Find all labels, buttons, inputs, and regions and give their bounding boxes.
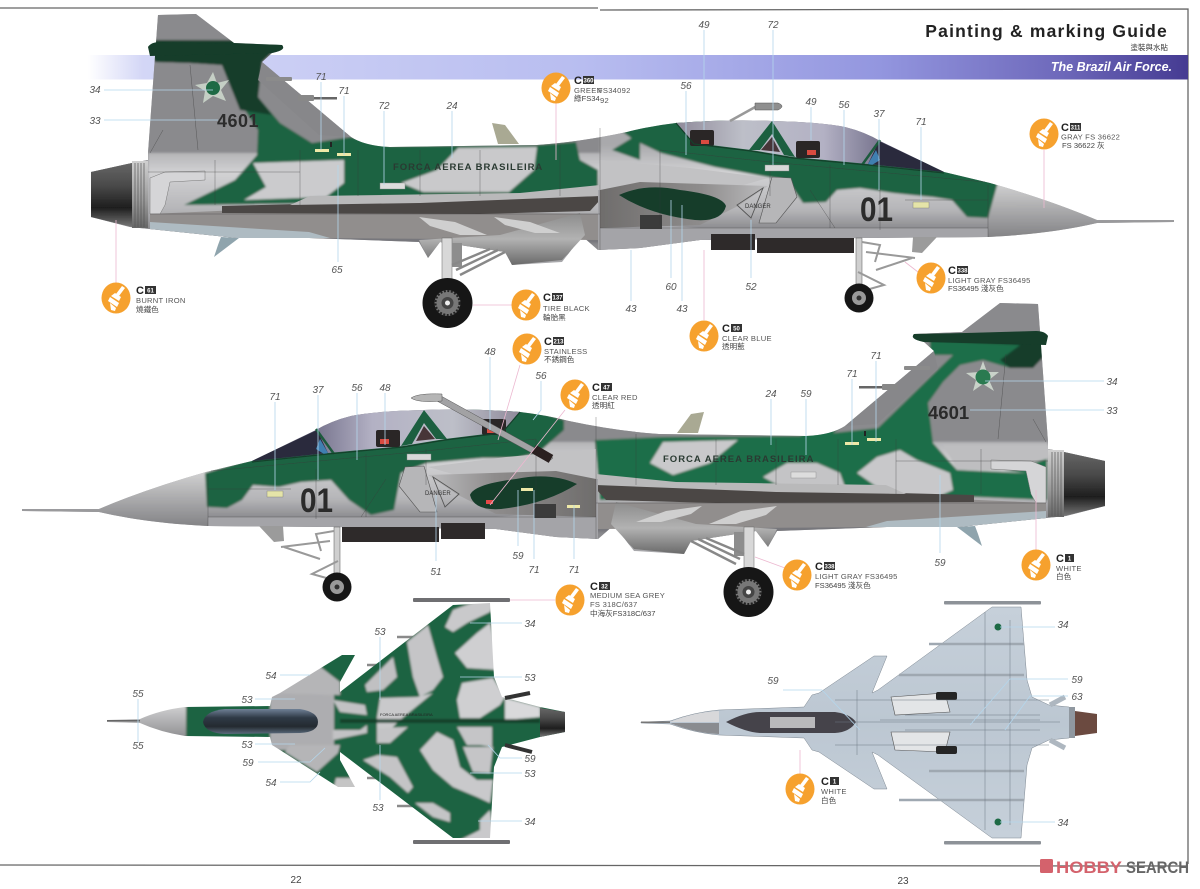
page number 23: 23: [897, 876, 909, 887]
callout: C360 green: 92: [600, 96, 609, 105]
callout: C32 medium sea grey: FS 318C/637: [590, 600, 638, 609]
labels and leader lines: upper side view: 71: [915, 117, 927, 128]
callout: C47 clear red: [560, 380, 638, 410]
labels and leader lines: lower side view: 24: [764, 389, 777, 400]
labels and leader lines: lower side view: 56: [535, 371, 547, 382]
nozzle: [540, 708, 565, 737]
labels and leader lines: lower side view: 71: [269, 392, 281, 403]
callout: C1 white: 白色: [1056, 571, 1072, 581]
callout: C311 gray: [1030, 118, 1120, 150]
labels and leader lines: top view: 53: [241, 695, 253, 706]
labels and leader lines: lower side view: [269, 347, 1118, 600]
labels and leader lines: top view: 59: [524, 754, 536, 765]
labels and leader lines: upper side view: 43: [676, 304, 688, 315]
labels and leader lines: top view: 34: [524, 817, 536, 828]
labels and leader lines: upper side view: 33: [89, 116, 101, 127]
callout: C61 burnt iron: [102, 282, 186, 314]
panel lines: [835, 612, 1060, 830]
labels and leader lines: top view: 53: [372, 803, 384, 814]
labels and leader lines: upper side view: 72: [767, 20, 779, 31]
callout: C338 light gray upper: 338: [957, 268, 968, 274]
callout: C360 green: 360: [583, 78, 594, 84]
probe: [107, 720, 140, 722]
labels and leader lines: upper side view: 72: [378, 101, 390, 112]
callout: C137 tire black: TIRE BLACK: [543, 304, 590, 313]
labels and leader lines: lower side view: 33: [1106, 406, 1118, 417]
callout: C50 clear blue: 透明藍: [722, 341, 745, 351]
callout: C338 light gray upper: C: [948, 265, 956, 277]
callout: C1 white underside: [786, 774, 847, 805]
callout: C360 green: GREEN: [574, 86, 602, 95]
subtitle chinese: 塗裝與水貼: [1130, 42, 1168, 52]
nose number: 01: [300, 482, 333, 520]
callout: C61 burnt iron: 燒鐵色: [136, 304, 159, 314]
top aircraft camouflage: [80, 5, 1190, 255]
callout: C338 light gray upper: FS36495 淺灰色: [948, 283, 1004, 293]
labels and leader lines: lower side view: 59: [512, 551, 524, 562]
labels and leader lines: upper side view: 49: [698, 20, 710, 31]
airbrake arms: [505, 693, 532, 752]
callout: C61 burnt iron: BURNT IRON: [136, 296, 186, 305]
title: Painting & marking Guide: [925, 21, 1168, 41]
labels and leader lines: top view: 54: [265, 778, 277, 789]
callout: C338 light gray lower: FS36495 淺灰色: [815, 580, 871, 590]
labels and leader lines: underside view: 59: [767, 676, 779, 687]
mast: [730, 103, 782, 121]
labels and leader lines: lower side view: 56: [351, 383, 363, 394]
aircraft: upper side view, facing right: [80, 5, 1190, 328]
fin roundel: [195, 72, 229, 103]
labels and leader lines: upper side view: 71: [315, 72, 327, 83]
callout: C311 gray: GRAY FS 36622: [1061, 132, 1120, 142]
purple title band: [88, 55, 1188, 80]
callout: C50 clear blue: [690, 320, 772, 352]
labels and leader lines: upper side view: 56: [680, 81, 692, 92]
labels and leader lines: upper side view: 60: [665, 282, 677, 293]
callout: C213 stainless: 213: [553, 340, 564, 346]
labels and leader lines: upper side view: 71: [338, 86, 350, 97]
labels and leader lines: upper side view: 24: [445, 101, 458, 112]
callout: C32 medium sea grey: MEDIUM SEA GREY: [590, 591, 665, 600]
fin roundel: [966, 361, 999, 391]
callout: C213 stainless: 不銹鋼色: [544, 354, 575, 364]
danger text: DANGER: [425, 491, 451, 497]
labels and leader lines: top view: 59: [242, 758, 254, 769]
callout: C47 clear red: CLEAR RED: [592, 393, 638, 402]
callout: C1 white underside: 白色: [821, 795, 837, 805]
red light: [486, 500, 493, 504]
aircraft: underside view, light grey: [641, 601, 1097, 844]
labels and leader lines: lower side view: 71: [528, 565, 540, 576]
callout: C32 medium sea grey: 32: [601, 584, 608, 590]
labels and leader lines: upper side view: 43: [625, 304, 637, 315]
callout: C1 white: WHITE: [1056, 564, 1082, 573]
labels and leader lines: upper side view: 34: [89, 85, 101, 96]
callout: C50 clear blue: CLEAR BLUE: [722, 334, 772, 343]
callout: C360 green: 綠FS34: [574, 93, 600, 103]
labels and leader lines: lower side view: 37: [312, 385, 324, 396]
callout: C1 white: C: [1056, 553, 1064, 565]
labels and leader lines: lower side view: 59: [934, 558, 946, 569]
roundels: [994, 624, 1002, 826]
callout: C1 white underside: WHITE: [821, 787, 847, 796]
callout: C47 clear red: C: [592, 382, 600, 394]
callout: C213 stainless: [512, 334, 587, 364]
labels and leader lines: underside view: 59: [1071, 675, 1083, 686]
labels and leader lines: top view: [132, 619, 536, 828]
nose shade: [670, 711, 719, 722]
labels and leader lines: top view: 53: [524, 673, 536, 684]
nose number: 01: [860, 191, 893, 229]
callout: C311 gray: FS 36622 灰: [1062, 140, 1105, 150]
ventral fins: [1050, 697, 1065, 748]
missiles under wings: [899, 644, 1024, 800]
callout: C61 burnt iron: C: [136, 285, 144, 297]
callout: C213 stainless: C: [544, 336, 552, 348]
callout: C338 light gray upper: [916, 262, 1031, 294]
aircraft: lower side view, facing left: [10, 295, 1120, 617]
nozzle: [1069, 707, 1075, 738]
labels and leader lines: top view: 34: [524, 619, 536, 630]
labels and leader lines: top view: 53: [374, 627, 386, 638]
labels and leader lines: lower side view: 34: [1106, 377, 1118, 388]
watermark: [1040, 859, 1189, 877]
labels and leader lines: underside view: [767, 620, 1083, 829]
callout: C61 burnt iron: 61: [147, 288, 154, 294]
labels and leader lines: lower side view: 51: [430, 567, 442, 578]
callout: C338 light gray lower: [782, 560, 898, 590]
tail number: 4601: [217, 111, 259, 131]
callout: C213 stainless: STAINLESS: [544, 347, 587, 356]
callout: C338 light gray lower: LIGHT GRAY FS36495: [815, 572, 898, 581]
lettering: FORCA AEREA BRASILEIRA: [380, 712, 433, 717]
callout: C50 clear blue: 50: [733, 326, 740, 332]
callout: C1 white: [1022, 550, 1082, 581]
callout: C1 white: 1: [1068, 556, 1072, 562]
callout: C137 tire black: [512, 290, 590, 322]
labels and leader lines: upper side view: 56: [838, 100, 850, 111]
callout: C1 white underside: 1: [833, 780, 837, 786]
cockpit floor: [726, 712, 856, 733]
callout: C360 green: FS34092: [598, 86, 631, 95]
band label: The Brazil Air Force.: [1051, 60, 1172, 74]
labels and leader lines: upper side view: 37: [873, 109, 885, 120]
probe: [641, 722, 670, 723]
stainless boarding tube: [411, 394, 553, 463]
labels and leader lines: underside view: 34: [1057, 818, 1069, 829]
labels and leader lines: top view: 53: [241, 740, 253, 751]
labels and leader lines: underside view: 63: [1071, 692, 1083, 703]
callout: C32 medium sea grey: C: [590, 581, 598, 593]
watermark: HOBBY: [1056, 859, 1122, 877]
labels and leader lines: upper side view: [89, 20, 1044, 320]
aircraft: top view camouflage scheme: [95, 595, 575, 850]
callout: C338 light gray upper: LIGHT GRAY FS36495: [948, 276, 1031, 285]
wheel wells: [891, 692, 957, 754]
callout: C32 medium sea grey: 中海灰FS318C/637: [590, 608, 655, 618]
labels and leader lines: lower side view: 48: [379, 383, 391, 394]
fuselage lettering: FORCA AEREA BRASILEIRA: [393, 162, 543, 173]
callout: C360 green: [542, 72, 631, 105]
labels and leader lines: lower side view: 71: [870, 351, 882, 362]
labels and leader lines: lower side view: 59: [800, 389, 812, 400]
labels and leader lines: upper side view: 49: [805, 97, 817, 108]
callout: C360 green: C: [574, 75, 582, 87]
labels and leader lines: upper side view: 52: [745, 282, 757, 293]
labels and leader lines: top view: 54: [265, 671, 277, 682]
danger text: DANGER: [745, 204, 771, 210]
labels and leader lines: top view: 53: [524, 769, 536, 780]
labels and leader lines: underside view: 34: [1057, 620, 1069, 631]
tail number: 4601: [928, 402, 969, 423]
callout: C1 white underside: C: [821, 776, 829, 788]
callout: C32 medium sea grey: [556, 581, 665, 618]
labels and leader lines: lower side view: 71: [568, 565, 580, 576]
labels and leader lines: lower side view: 71: [846, 369, 858, 380]
callout: C47 clear red: 透明紅: [592, 400, 615, 410]
callout: C137 tire black: 137: [552, 296, 563, 302]
labels and leader lines: upper side view: 65: [331, 265, 343, 276]
callout: C137 tire black: 輪胎黑: [543, 312, 566, 322]
labels and leader lines: lower side view: 48: [484, 347, 496, 358]
callout: C311 gray: 311: [1071, 126, 1081, 132]
fuselage lettering: FORCA AEREA BRASILEIRA: [663, 454, 814, 465]
lower aircraft camouflage: [10, 295, 1120, 545]
labels and leader lines: top view: 55: [132, 741, 144, 752]
canopy: [203, 709, 318, 734]
callout: C311 gray: C: [1061, 122, 1069, 134]
labels and leader lines: top view: 55: [132, 689, 144, 700]
watermark: SEARCH: [1126, 859, 1189, 877]
callout: C338 light gray lower: 338: [824, 564, 835, 570]
page number 22: 22: [290, 875, 302, 886]
callout: C50 clear blue: C: [722, 323, 730, 335]
callout: C137 tire black: C: [543, 292, 551, 304]
callout: C338 light gray lower: C: [815, 561, 823, 573]
callout: C47 clear red: 47: [603, 386, 610, 392]
